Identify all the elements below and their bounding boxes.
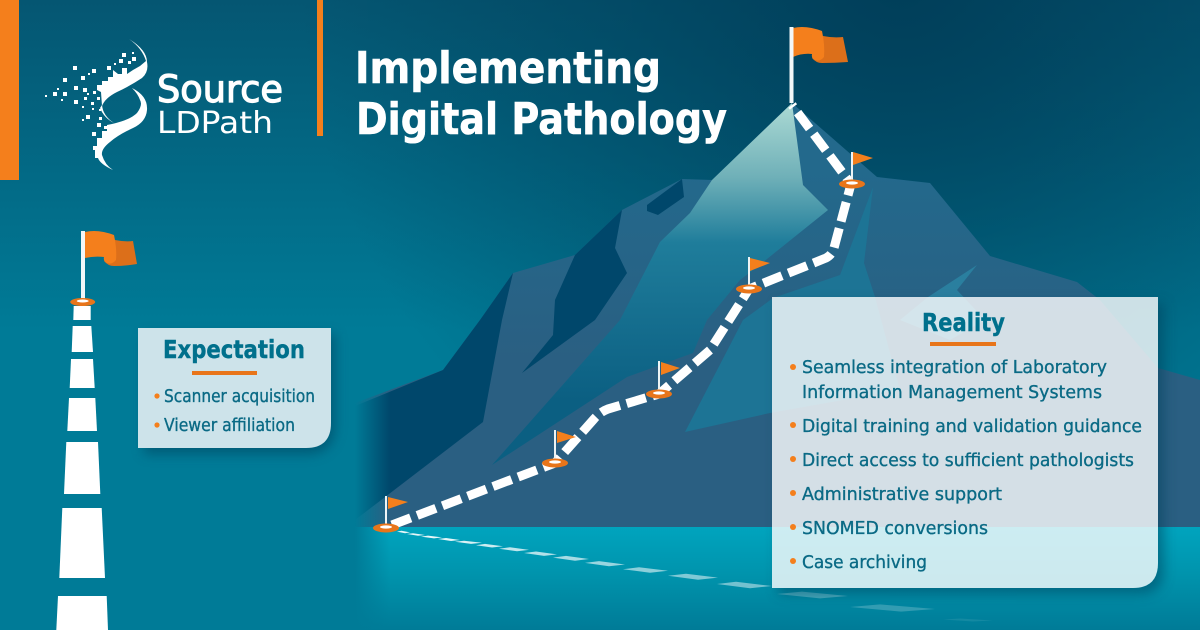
mountain xyxy=(355,103,1200,527)
title xyxy=(355,43,727,145)
panel background xyxy=(772,297,1158,588)
reality list: Direct access to sufficient pathologists xyxy=(802,450,1134,471)
panel background xyxy=(138,328,331,448)
trail reflection on water xyxy=(397,531,993,622)
reality list: Information Management Systems xyxy=(802,382,1102,403)
reality list: SNOMED conversions xyxy=(802,518,988,539)
reality list xyxy=(790,357,1142,573)
title: Implementing xyxy=(355,43,661,94)
reality list: Seamless integration of Laboratory xyxy=(802,357,1107,378)
trail on mountain xyxy=(392,105,851,525)
mountain silhouette xyxy=(355,103,1200,527)
orange corner bar xyxy=(0,0,19,180)
waypoint flag 2 xyxy=(542,430,576,468)
waypoint flag 3 xyxy=(646,361,680,398)
waypoint flag 5 xyxy=(839,152,873,188)
logo wordmark: LDPath xyxy=(157,106,273,141)
panel: reality xyxy=(772,297,1164,594)
expectation list: Scanner acquisition xyxy=(164,387,315,407)
logo wordmark: Source xyxy=(157,68,283,111)
lit summit face xyxy=(492,103,828,465)
expectation list: Viewer affiliation xyxy=(164,416,295,436)
left flag base xyxy=(70,298,95,306)
left flag xyxy=(81,231,137,300)
logo icon: dna helix xyxy=(45,39,147,170)
dark left face xyxy=(355,273,513,520)
waypoint flag 1 xyxy=(373,496,408,532)
water xyxy=(340,527,1200,630)
expectation list xyxy=(154,387,315,436)
reality heading: Reality xyxy=(922,308,1005,337)
heading underline xyxy=(930,342,996,346)
small right facet xyxy=(900,265,985,340)
dark upper notch xyxy=(647,179,684,215)
panel shadow xyxy=(144,334,335,454)
panel shadow xyxy=(778,303,1164,594)
left fade of mountain and water xyxy=(340,390,390,630)
reality list: Digital training and validation guidance xyxy=(802,416,1142,437)
reality list: Case archiving xyxy=(802,552,927,573)
dark central crevice xyxy=(522,210,627,373)
straight road xyxy=(56,306,108,630)
waypoint flag 4 xyxy=(736,257,770,294)
expectation heading: Expectation xyxy=(163,335,305,364)
orange divider xyxy=(317,0,323,136)
logo wordmark xyxy=(157,68,283,141)
heading underline xyxy=(192,371,257,375)
title: Digital Pathology xyxy=(356,94,727,145)
logo xyxy=(45,39,283,170)
right teal face xyxy=(685,187,900,432)
panel: expectation xyxy=(138,328,335,454)
summit flag xyxy=(790,27,848,103)
reality list: Administrative support xyxy=(802,484,1002,505)
